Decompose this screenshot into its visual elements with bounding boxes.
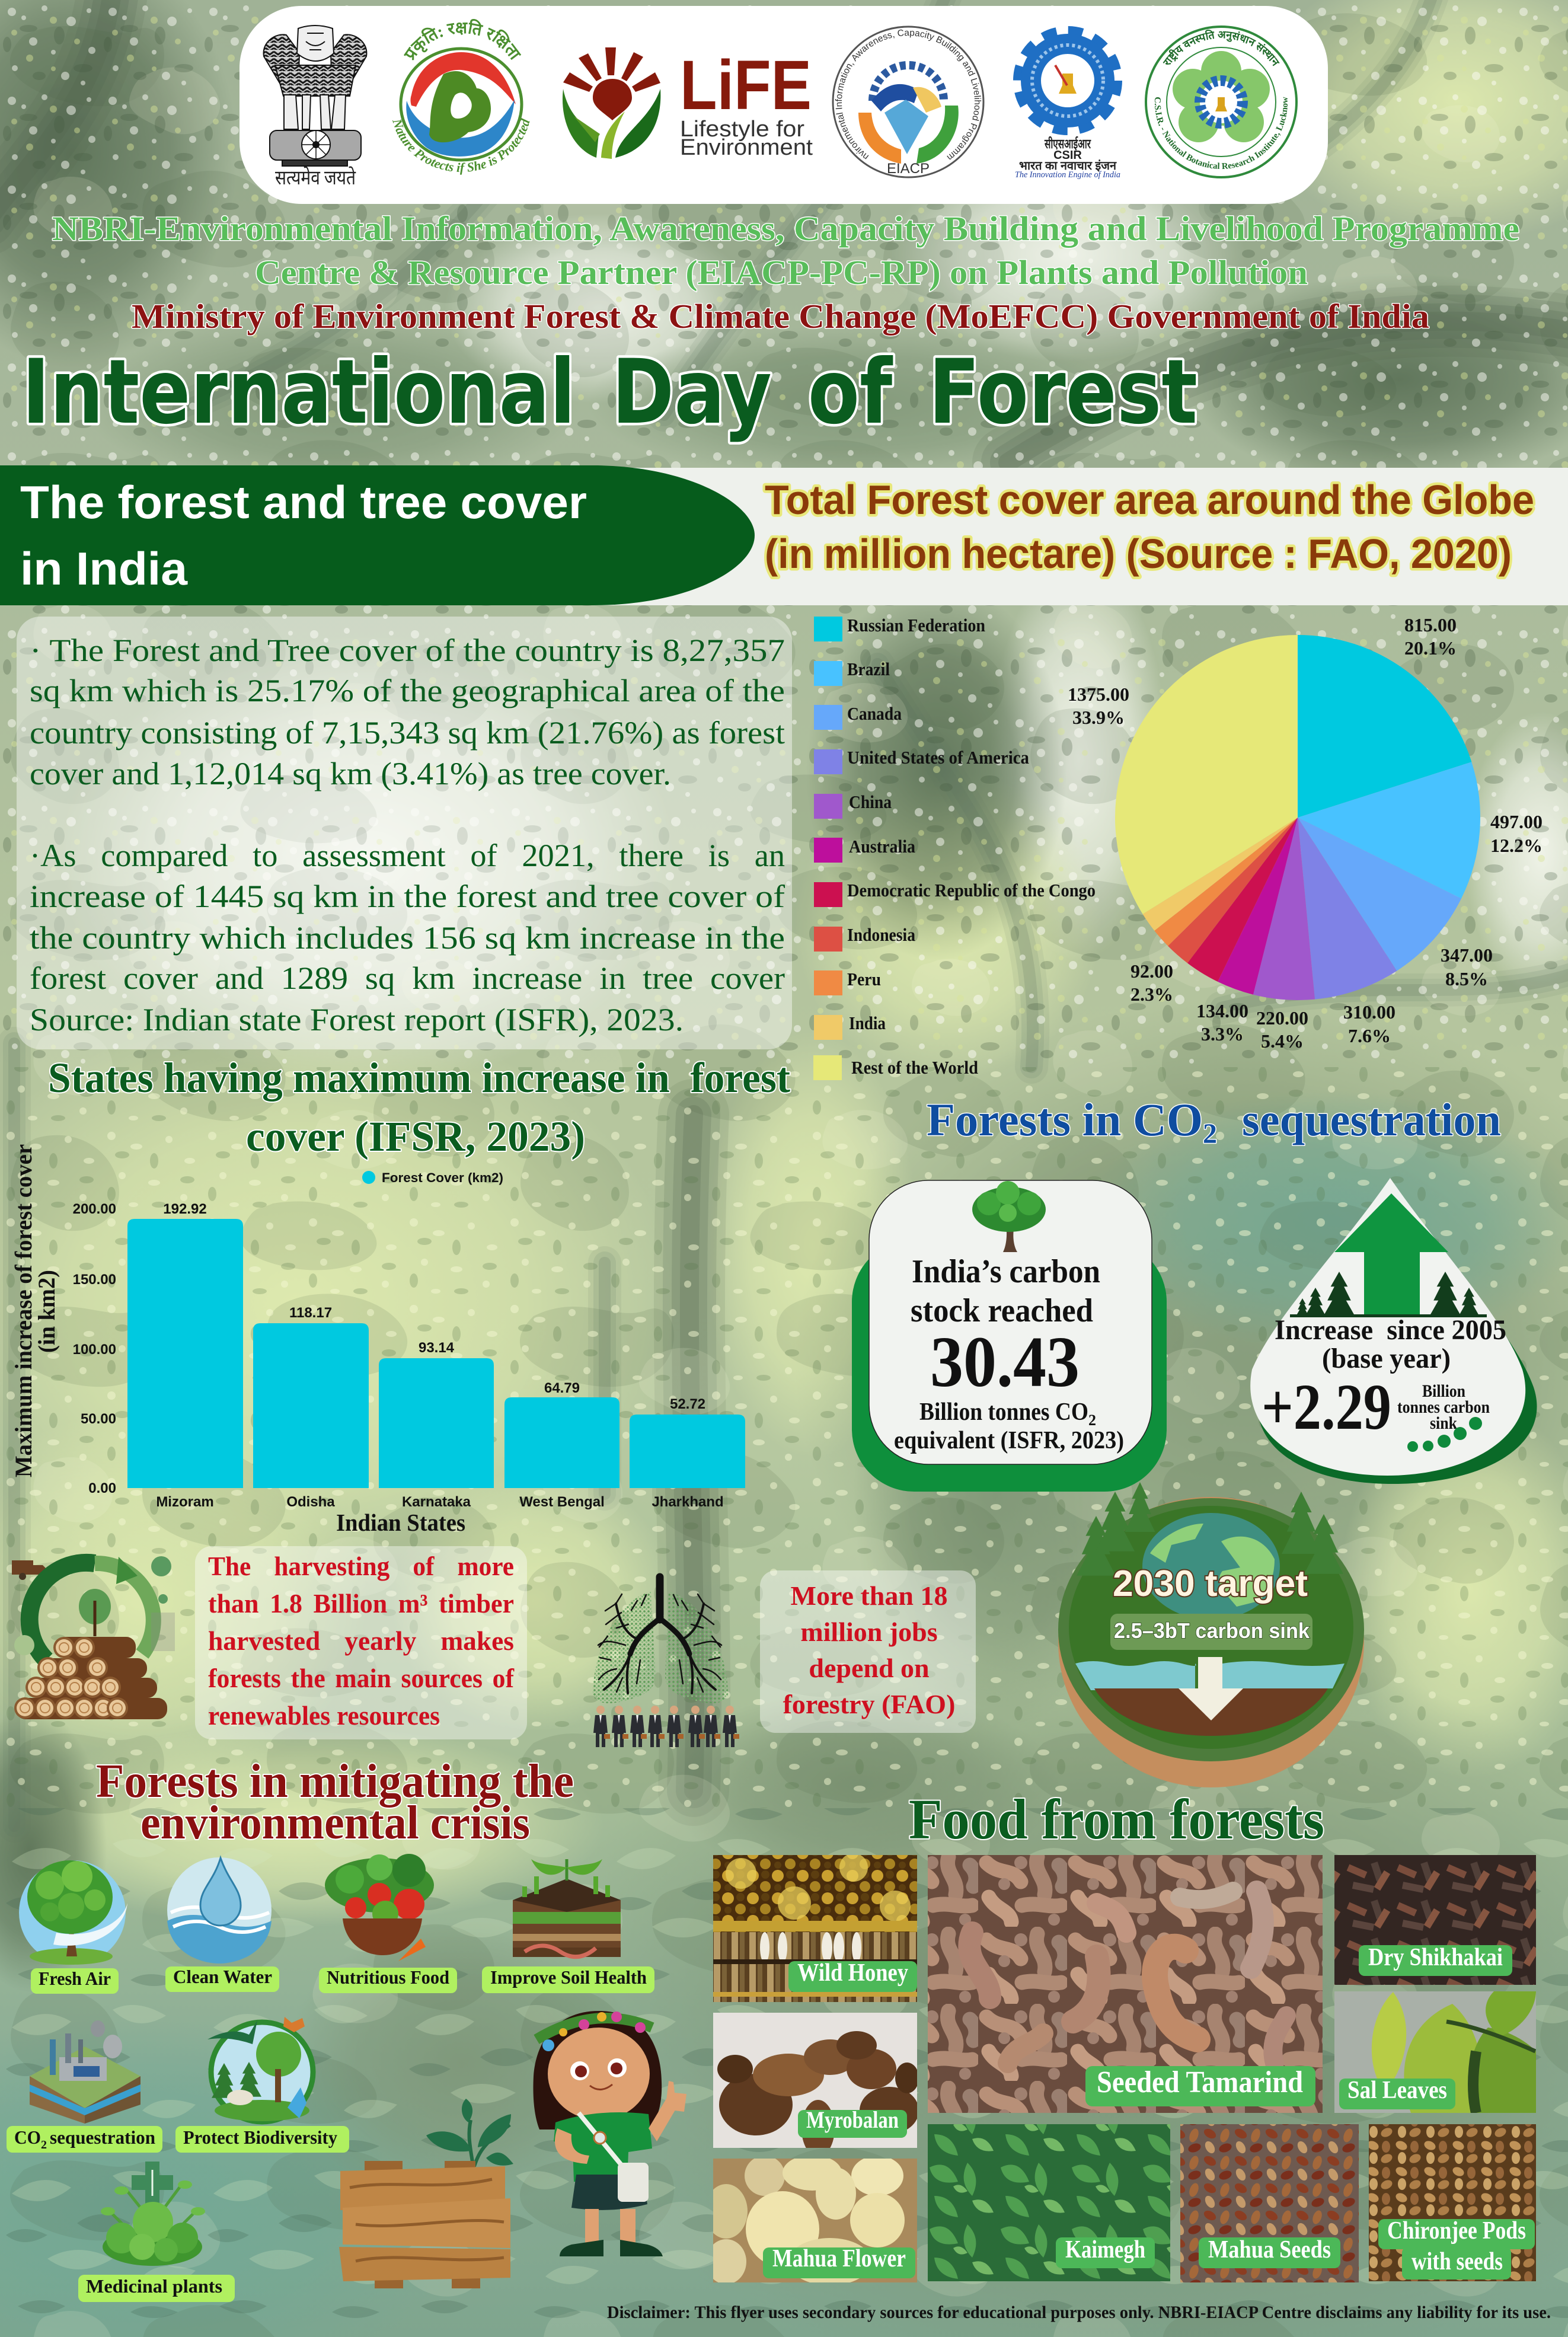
heading: food from forests: Food from forests [909,1787,1324,1851]
heading: forests in CO2 sequestration: 2 [1203,1118,1217,1150]
pie value labels: 310.00 [1343,1001,1395,1023]
y axis: 150.00 [73,1272,116,1288]
label: Myrobalan [806,2106,899,2133]
badge: 2030 target disc: 2.5–3bT carbon sink [1114,1618,1310,1643]
bar values: 64.79 [544,1380,580,1396]
icon: pine trees [1077,1482,1343,1576]
photo: mahua seeds [1180,2124,1359,2282]
benefit: nutritious food [319,1854,457,1993]
y axis: 50.00 [81,1411,116,1427]
logo: nature protects: Nature Protects if She is Protected [392,118,530,175]
pie legend: Russian Federation [847,615,985,636]
card: India's carbon stock: stock reached [911,1292,1093,1329]
pie value labels: 1375.00 [1068,684,1129,705]
logo: CSIR [1015,32,1120,180]
callout: forestry jobs: forestry (FAO) [783,1689,955,1719]
pie legend: Peru [847,969,881,989]
y axis title: Maximum increase of forest cover [10,1144,37,1477]
category labels: Jharkhand [652,1494,724,1510]
pie value labels: 20.1% [1404,637,1457,659]
icon: tree [972,1181,1046,1252]
pie legend: Democratic Republic of the Congo [847,880,1096,901]
pie value labels: 497.00 [1490,811,1543,832]
y axis: 100.00 [73,1342,116,1358]
photo: wild honey [713,1853,917,2002]
badge: 2030 target disc [1058,1482,1364,1787]
category labels: West Bengal [519,1494,605,1510]
label [1378,2217,1535,2279]
text panel: forest and tree cover facts: ·As compared to assessment of 2021, there is an [30,838,785,873]
photo: seeded tamarind [928,1855,1323,2113]
bar values: 52.72 [670,1396,705,1412]
pie legend: Indonesia [847,924,915,945]
card: India's carbon stock: India’s carbon [912,1253,1100,1290]
card: India's carbon stock: 2 [1088,1412,1096,1429]
category labels: Mizoram [156,1494,214,1510]
label: Mahua Seeds [1208,2236,1331,2263]
illustration: wooden sign with sprout [339,2099,513,2288]
logo: CSIR: CSIR [1053,149,1082,162]
heading: forests in mitigating the environmental crisis: Forests in mitigating the [96,1755,574,1808]
heading: states with maximum increase: cover (IFSR, 2023) [246,1113,585,1160]
callout: forestry jobs [760,1570,976,1733]
callout: forestry jobs: More than 18 [791,1581,947,1611]
heading: forests in CO2 sequestration [927,1094,1501,1150]
category labels [156,1494,724,1510]
text panel: forest and tree cover facts: sq km which is 25.17% of the geographical area of the [30,673,785,708]
heading: NBRI programme: Centre & Resource Partner (EIACP-PC-RP) on Plants and Pollution [255,253,1308,292]
logo: EIACP: EIACP [887,161,930,177]
logo: national emblem [264,25,366,189]
pie value labels: 33.9% [1072,707,1125,728]
benefit: CO2 sequestration [7,2020,162,2153]
label: Clean Water [173,1966,272,1987]
callout: forestry jobs: million jobs [800,1617,938,1647]
heading: total forest cover: Total Forest cover area around the Globe [765,477,1534,523]
card: carbon sink increase: sink [1430,1413,1457,1433]
card: carbon sink increase [1250,1178,1537,1484]
illustration: girl character [533,2011,686,2256]
pie legend: China [849,791,892,812]
y axis: 0.00 [88,1480,116,1496]
label: Mahua Flower [772,2245,906,2272]
label [7,2126,162,2153]
pie value labels: 92.00 [1131,960,1173,982]
pie value labels: 134.00 [1196,1000,1248,1021]
logo: NBRI: राष्ट्रीय वनस्पति अनुसंधान संस्थान [1161,28,1282,69]
heading: states with maximum increase [48,1054,790,1160]
callout: timber harvesting: forests the main sources of [208,1663,515,1693]
pie value labels: 12.2% [1490,835,1543,856]
chart legend: Forest Cover (km2) [382,1170,503,1185]
pie legend: India [849,1013,886,1033]
logo: nature protects: प्रकृति: रक्षति रक्षिता [404,19,522,60]
logo: LiFE: Lifestyle for [680,117,804,142]
pie chart: forest area by country [813,614,1543,1080]
text panel: forest and tree cover facts: forest cover and 1289 sq km increase in tree cover [30,960,785,996]
logo: NBRI: C.S.I.R. - National Botanical Research Institute, Lucknow [1152,97,1290,171]
card: carbon sink increase: Increase since 2005 [1275,1314,1506,1346]
text panel: forest and tree cover facts: the country which includes 156 sq km increase in the [30,920,785,956]
heading: forests in CO2 sequestration: sequestration [1242,1094,1501,1145]
y axis: 200.00 [73,1201,116,1217]
pie slices [1115,635,1480,1000]
card: India's carbon stock: Billion tonnes CO [919,1399,1088,1426]
photo: chironjee pods [1369,2124,1536,2281]
heading: NBRI programme: Ministry of Environment Forest & Climate Change (MoEFCC) Government of India [132,297,1429,336]
card: carbon sink increase: (base year) [1322,1343,1451,1374]
photo: mahua flower [705,2155,917,2285]
text panel: forest and tree cover facts: · The Forest and Tree cover of the country is 8,27,357 [30,633,785,668]
benefit: medicinal plants [78,2162,235,2302]
benefit: soil health [482,1859,654,1993]
icon: globe [1142,1513,1280,1620]
y axis [73,1201,116,1496]
logo: NBRI [1146,27,1296,177]
callout: forestry jobs: depend on [809,1653,930,1683]
bar values [163,1201,705,1412]
pie value labels: 8.5% [1445,968,1488,989]
label: with seeds [1411,2248,1503,2275]
bar values: 93.14 [419,1340,455,1356]
heading: NBRI programme: NBRI-Environmental Information, Awareness, Capacity Building and Livelihood Programme [52,209,1519,248]
pie legend: United States of America [847,747,1029,768]
logo: CSIR: सीएसआईआर [1044,136,1091,151]
badge: 2030 target disc: 2030 target [1113,1563,1308,1604]
text panel: forest and tree cover facts: Source: Indian state Forest report (ISFR), 2023. [30,1002,684,1037]
label: CO [14,2127,41,2148]
heading: total forest cover: (in million hectare) (Source : FAO, 2020) [765,531,1512,577]
pie legend [813,615,1096,1080]
label: Nutritious Food [327,1966,449,1988]
card: carbon sink increase: tonnes carbon [1397,1397,1490,1417]
pie legend: Australia [849,836,915,857]
heading pill: forest and tree cover in India: in India [20,542,188,595]
heading pill: forest and tree cover in India: The forest and tree cover [20,476,587,528]
card: India's carbon stock [852,1180,1167,1492]
callout: timber harvesting: The harvesting of more [208,1551,514,1581]
label: 2 [41,2138,47,2151]
photo: sal leaves [1334,1991,1536,2113]
callout: timber harvesting [195,1546,527,1739]
logo: LiFE: Environment [680,135,813,160]
pie legend: Brazil [847,659,890,679]
heading: forests in CO2 sequestration: Forests in CO [927,1094,1203,1145]
benefit: biodiversity [175,2017,349,2153]
benefit: clean water [165,1857,279,1992]
callout: timber harvesting: than 1.8 Billion m³ timber [208,1588,514,1618]
card: India's carbon stock: 30.43 [930,1322,1080,1402]
label: Kaimegh [1065,2236,1145,2263]
heading pill: forest and tree cover in India [0,465,755,605]
bars [127,1219,745,1488]
icon: lungs and people [593,1577,739,1747]
text panel: forest and tree cover facts: country consisting of 7,15,343 sq km (21.76%) as forest [30,715,785,751]
pie legend: Rest of the World [851,1057,978,1078]
pie value labels: 347.00 [1441,944,1493,966]
label: Chironjee Pods [1387,2217,1526,2245]
pie value labels: 7.6% [1348,1025,1391,1046]
icon: timber cycle [12,1556,175,1719]
pie value labels: 220.00 [1256,1007,1308,1029]
label: Wild Honey [797,1959,908,1987]
label: Protect Biodiversity [183,2127,337,2148]
pie legend: Canada [847,703,902,724]
text panel: forest and tree cover facts [17,617,792,1049]
card: carbon sink increase: +2.29 [1262,1371,1391,1443]
label [78,2275,235,2302]
label: Medicinal plants [86,2275,222,2297]
bar values: 118.17 [289,1305,332,1321]
text panel: forest and tree cover facts: increase of 1445 sq km in the forest and tree cover of [30,879,785,914]
heading: total forest cover [765,477,1534,577]
logo: CSIR: The Innovation Engine of India [1015,170,1120,180]
logo panel [0,0,1328,204]
bar values: 192.92 [163,1201,207,1217]
category labels: Odisha [286,1494,335,1510]
logo: nature protects [389,18,533,175]
title: International Day of Forest [22,341,1197,444]
heading: states with maximum increase: States having maximum increase in forest [48,1054,790,1102]
logo: LiFE: LiFE [680,46,812,124]
photo: kaimegh [928,2124,1170,2281]
label: Sal Leaves [1347,2077,1447,2104]
logo: LiFE [563,46,813,160]
label: Dry Shikhakai [1368,1944,1503,1971]
label: Seeded Tamarind [1097,2065,1303,2099]
y axis title [10,1144,60,1477]
x axis title: Indian States [336,1509,465,1536]
pie value labels: 815.00 [1404,614,1457,636]
pie value labels: 5.4% [1261,1030,1304,1052]
heading: NBRI programme [52,209,1519,336]
callout: timber harvesting: harvested yearly makes [208,1626,514,1656]
pie value labels: 2.3% [1131,984,1173,1005]
bar chart: forest cover increase by state [10,1144,745,1536]
card: carbon sink increase: Billion [1422,1381,1465,1401]
card: India's carbon stock: equivalent (ISFR, 2023) [894,1427,1124,1454]
photo: dry shikhakai [1334,1855,1536,1985]
benefit: fresh air [19,1860,127,1994]
logo: national emblem: सत्यमेव जयते [275,166,356,189]
heading: forests in mitigating the environmental crisis [96,1755,574,1849]
pie value labels [1068,614,1543,1052]
y axis title: (in km2) [33,1270,60,1353]
label: Improve Soil Health [490,1966,647,1988]
heading: forests in mitigating the environmental crisis: environmental crisis [140,1797,530,1849]
logo: CSIR: भारत का नवाचार इंजन [1019,159,1117,173]
icon: up arrow with trees [1290,1193,1487,1317]
pie value labels: 3.3% [1201,1023,1244,1045]
callout: timber harvesting: renewables resources [208,1700,440,1731]
category labels: Karnataka [402,1494,471,1510]
band: section headers [0,465,1568,605]
photo: myrobalan [713,2013,919,2157]
label: Fresh Air [39,1968,111,1989]
label: sequestration [50,2127,155,2148]
text panel: forest and tree cover facts: cover and 1,12,014 sq km (3.41%) as tree cover. [30,756,671,791]
